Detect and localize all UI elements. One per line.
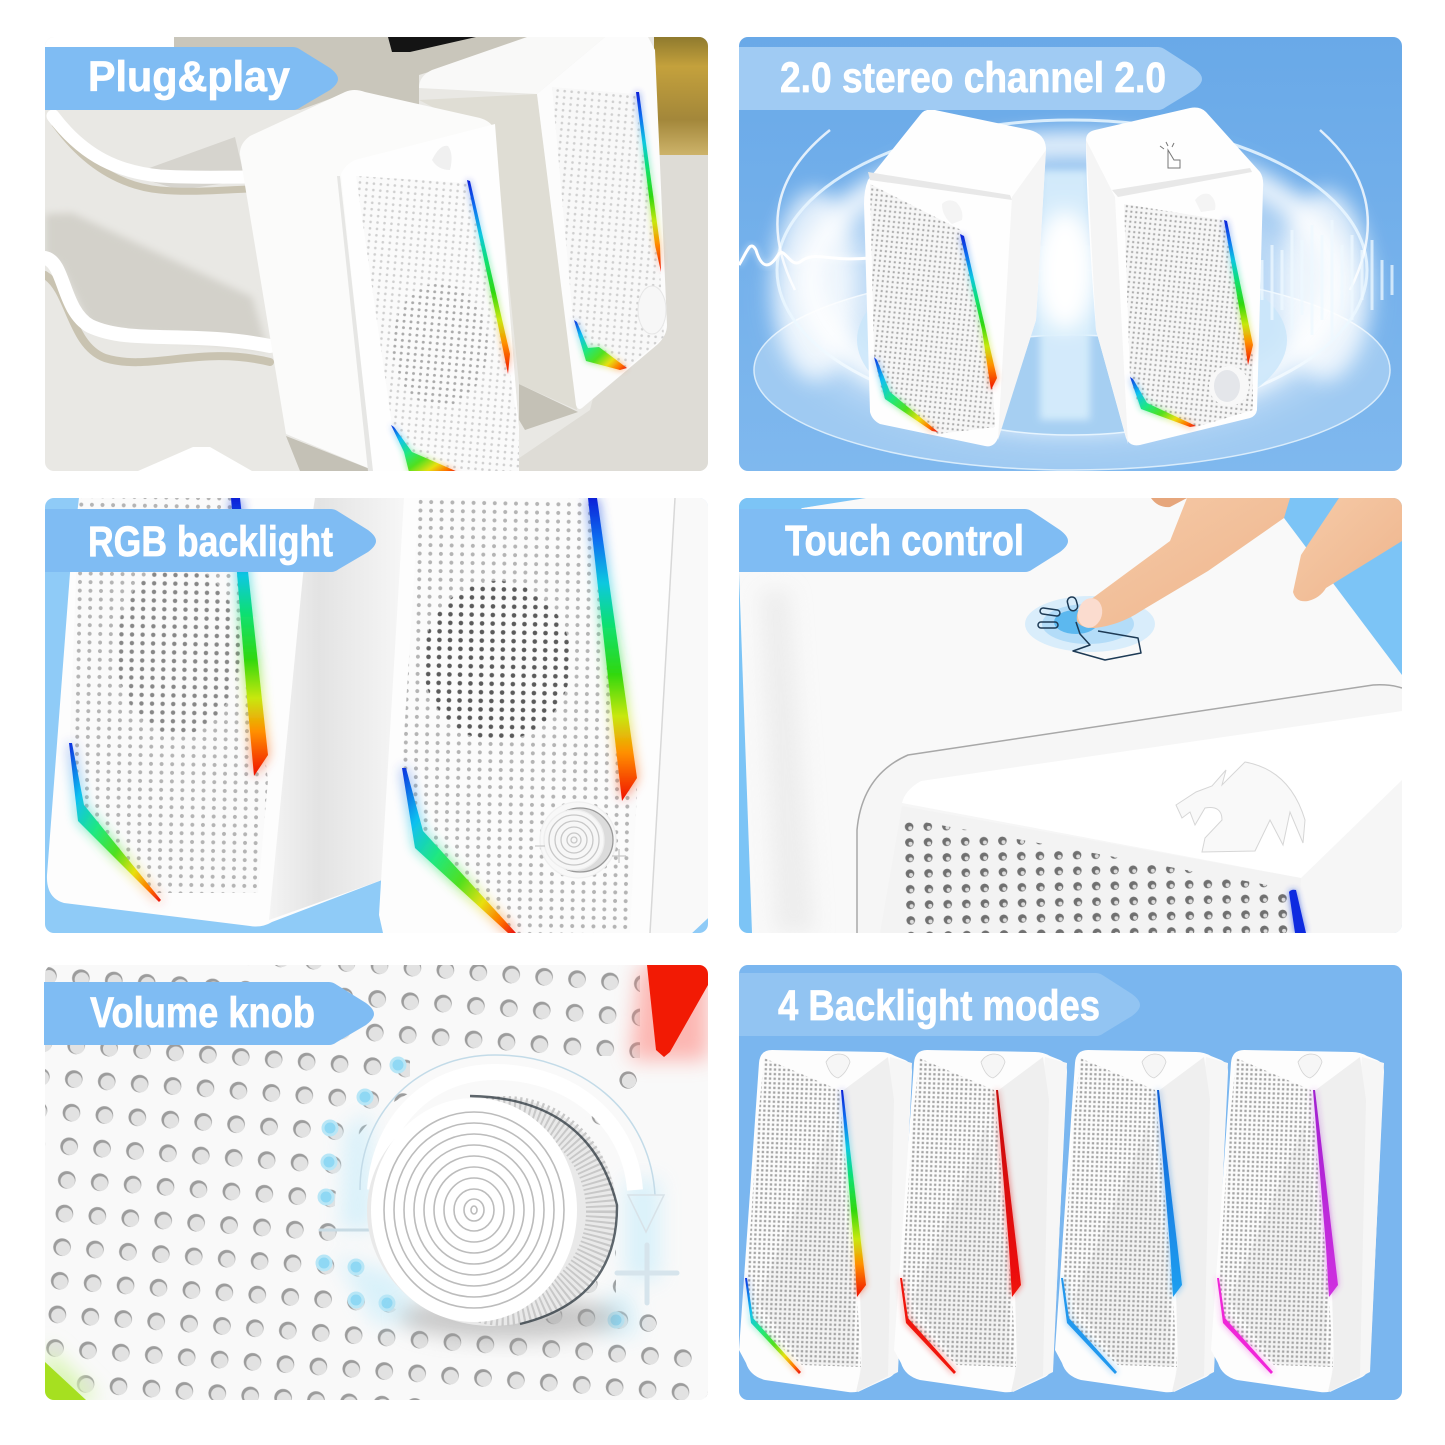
purple strip xyxy=(1217,1278,1273,1374)
blue glow xyxy=(335,1110,660,1335)
waveform right xyxy=(1260,230,1394,335)
rgb strip xyxy=(391,425,458,472)
banner: rgb backlight xyxy=(45,509,376,572)
rgb strip xyxy=(1224,220,1253,365)
rgb strip xyxy=(874,357,938,432)
blue background xyxy=(739,37,1402,471)
blue background xyxy=(739,965,1402,1400)
desk shadows xyxy=(45,137,578,471)
panel: volume knob xyxy=(44,965,708,1400)
rgb strip xyxy=(231,498,268,776)
speaker: blue mode xyxy=(1055,1050,1228,1392)
rgb strip xyxy=(960,234,997,390)
speaker: purple mode xyxy=(1211,1050,1384,1392)
heading: RGB backlight xyxy=(88,518,333,566)
red strip xyxy=(996,1090,1021,1297)
banner: backlight modes xyxy=(739,973,1140,1036)
soft left shading xyxy=(766,599,808,926)
rgb strip xyxy=(574,320,627,370)
rgb strip xyxy=(636,92,661,272)
volume knob xyxy=(535,802,626,878)
speaker front corner xyxy=(857,685,1402,933)
speaker: left xyxy=(864,110,1046,446)
white perforated grille xyxy=(45,965,708,1400)
heading: 4 Backlight modes xyxy=(778,982,1100,1030)
rgb strip xyxy=(1130,377,1196,427)
heading: Touch control xyxy=(785,517,1024,565)
panel: rgb backlight xyxy=(45,498,708,933)
grille dots xyxy=(619,1071,657,1332)
speaker top face xyxy=(739,498,1402,933)
banner: volume knob xyxy=(44,982,374,1045)
waveform left xyxy=(739,246,870,265)
desk surface xyxy=(45,37,708,471)
heading: Plug&play xyxy=(88,53,290,101)
banner: plug and play xyxy=(45,47,338,110)
touch icon xyxy=(1160,142,1180,168)
cables xyxy=(45,116,270,362)
rgb strip xyxy=(467,180,510,374)
sound wave rings xyxy=(754,120,1390,470)
knob shadow xyxy=(400,1296,620,1340)
second finger xyxy=(1293,498,1402,601)
rgb strip xyxy=(745,1278,801,1374)
speaker: front xyxy=(240,90,519,472)
volume knob xyxy=(1209,366,1249,406)
red strip xyxy=(900,1278,956,1374)
panel: backlight modes xyxy=(739,965,1402,1400)
rgb strip xyxy=(69,743,161,902)
rgb strip xyxy=(841,1090,866,1297)
dial ring and symbols xyxy=(320,1055,677,1303)
panel: plug and play xyxy=(45,37,708,472)
speaker: rainbow mode xyxy=(739,1050,912,1392)
blue lit dots xyxy=(317,1058,623,1327)
purple strip xyxy=(1313,1090,1338,1297)
blue background xyxy=(45,498,708,933)
foreground white object xyxy=(138,447,252,471)
blue strip xyxy=(1061,1278,1117,1374)
woofer dots xyxy=(116,565,240,735)
heading: Volume knob xyxy=(90,989,315,1037)
panel: touch control xyxy=(739,498,1402,933)
grille cover around knob xyxy=(335,965,708,1400)
banner: stereo channel xyxy=(739,47,1202,110)
background props xyxy=(45,37,708,471)
heading: 2.0 stereo channel 2.0 xyxy=(780,54,1166,102)
speaker: left xyxy=(47,498,410,926)
speaker: right xyxy=(379,498,708,933)
knob xyxy=(367,1096,617,1326)
blue corner top left xyxy=(739,498,860,508)
dragon logo xyxy=(1176,762,1305,852)
woofer dots xyxy=(423,581,571,741)
hand: pointing finger xyxy=(1075,498,1402,631)
panel: stereo channel xyxy=(739,37,1402,471)
speaker: red mode xyxy=(894,1050,1067,1392)
blue strip xyxy=(1157,1090,1182,1297)
touch icon xyxy=(1025,596,1155,660)
blue rgb strip xyxy=(1289,890,1306,933)
speaker: right xyxy=(1086,108,1263,445)
blue background xyxy=(739,498,1402,933)
speaker: rear xyxy=(419,37,667,410)
banner: touch control xyxy=(739,509,1068,572)
green glow corner xyxy=(45,1345,100,1400)
red glow and strip xyxy=(630,965,708,1060)
rgb strip xyxy=(588,498,637,801)
rgb strip xyxy=(402,768,516,933)
